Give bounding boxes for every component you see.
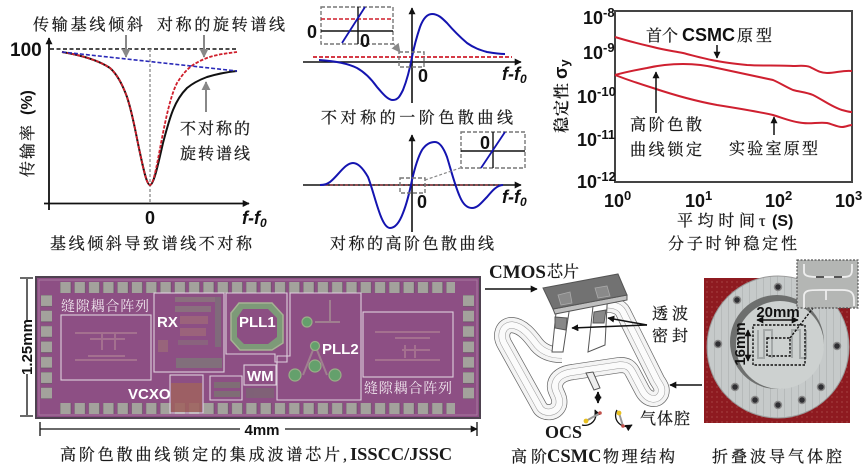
- arrow to chip: [485, 288, 537, 290]
- x axis title: [677, 212, 793, 230]
- coupling double arrow: [597, 392, 599, 403]
- connector: [425, 168, 460, 180]
- y axis title: y: [557, 59, 572, 67]
- circuit: right array traces: [375, 332, 440, 360]
- transitions: [552, 287, 608, 390]
- dimension: 1.25mm: 1.25mm: [19, 319, 36, 375]
- inset: 0: [360, 31, 370, 51]
- offset line: [320, 184, 503, 186]
- chip labels: PLL2: [322, 341, 359, 358]
- caption: 折叠波导气体腔: [712, 448, 842, 466]
- circuit: PLL1 inner: [237, 309, 277, 344]
- chip labels: VCXO: [128, 386, 171, 403]
- chip labels: RX: [157, 314, 178, 331]
- label: high order lock: 曲线锁定: [630, 140, 702, 159]
- caption: [511, 447, 675, 467]
- x tick labels: 10: [835, 191, 855, 211]
- caption: [60, 444, 452, 464]
- connector: [393, 43, 400, 52]
- x axis label: 0: [520, 72, 527, 86]
- y tick labels: 10: [577, 87, 597, 107]
- inset: 0: [307, 22, 317, 42]
- label: high order lock: 高阶色散: [630, 115, 702, 134]
- PCB board: [704, 278, 850, 423]
- inner recess: [730, 295, 824, 389]
- arrow from gas cell: [670, 384, 702, 386]
- x axis label: f-f: [242, 208, 260, 228]
- dimension: 16mm: 16mm: [732, 322, 749, 366]
- y tick labels: -11: [597, 127, 615, 142]
- circuit: VCXO: [171, 383, 202, 412]
- caption: CSMC: [547, 447, 601, 467]
- x axis title: τ: [759, 213, 766, 230]
- x tick labels: [604, 188, 862, 211]
- x axis label: 0: [520, 195, 527, 209]
- y tick labels: 10: [577, 172, 597, 192]
- y tick labels: 10: [577, 130, 597, 150]
- waveguide loop: [502, 305, 662, 412]
- label: asymmetric rotational line: 旋转谱线: [180, 145, 250, 163]
- chip labels: WM: [247, 368, 274, 385]
- label: CMOS chip: 芯片: [547, 263, 579, 281]
- pads: [41, 282, 474, 414]
- CMOS chip block: [543, 274, 627, 314]
- zoom box: [399, 52, 424, 67]
- label: asymmetric rotational line: 不对称的: [180, 120, 250, 138]
- y tick labels: -8: [603, 5, 615, 20]
- caption: 对称的高阶色散曲线: [330, 234, 494, 253]
- zoom box: [400, 178, 425, 193]
- chip labels: 缝隙耦合阵列: [364, 380, 452, 397]
- caption: 高阶: [511, 447, 547, 466]
- panel: CSMC physical structure: [485, 262, 702, 467]
- dimension: 4mm: [40, 422, 477, 439]
- caption: 物理结构: [603, 448, 675, 466]
- chip labels: 缝隙耦合阵列: [61, 298, 149, 315]
- dimension: 1.25mm: [19, 278, 36, 416]
- y axis title: [551, 59, 572, 133]
- label: first CSMC: 首个: [646, 27, 678, 45]
- curve: [320, 142, 503, 228]
- zero label: 0: [417, 192, 427, 212]
- y axis title: [19, 90, 37, 177]
- label: first CSMC: 原型: [737, 27, 772, 45]
- x tick labels: 10: [604, 191, 624, 211]
- molecules: [582, 410, 632, 428]
- inset: [307, 7, 393, 51]
- x axis label: 0: [260, 216, 267, 230]
- label: gas cell: 气体腔: [640, 410, 690, 428]
- panel: integrated chip photo: [19, 277, 480, 464]
- label: CMOS chip: CMOS: [489, 262, 546, 283]
- circuit: PLL2 inductors: [289, 300, 341, 381]
- openings in chip: [558, 286, 610, 305]
- panel: high order dispersion: [303, 132, 527, 253]
- inner floor: [736, 301, 824, 389]
- label: asymmetric rotational line: [180, 120, 250, 163]
- dimension boxes: [753, 308, 813, 365]
- y axis title: (%): [19, 90, 36, 115]
- curve: lab prototype: [615, 75, 852, 127]
- region outlines: [61, 293, 453, 413]
- curve: asymmetric line: [62, 52, 237, 185]
- caption: ISSCC/JSSC: [350, 444, 452, 464]
- y tick labels: -12: [597, 169, 616, 184]
- zero label: 0: [418, 66, 428, 86]
- x tick labels: 10: [765, 191, 785, 211]
- chip labels: [61, 298, 452, 403]
- y tick labels: 10: [583, 8, 603, 28]
- dimension: 20mm: 20mm: [756, 304, 800, 321]
- label: first CSMC: [646, 25, 772, 45]
- circuit: RX block: [158, 297, 222, 368]
- inset: [461, 132, 525, 168]
- curve: symmetric line: [62, 52, 237, 185]
- y tick labels: [577, 5, 616, 192]
- x tick 0: 0: [145, 208, 155, 228]
- x tick labels: 10: [685, 191, 705, 211]
- axes: [44, 38, 249, 210]
- caption: 不对称的一阶色散曲线: [321, 109, 513, 127]
- axes: [303, 135, 521, 232]
- dimension: 4mm: 4mm: [244, 422, 280, 439]
- curve: [319, 14, 505, 100]
- x axis title: 平均时间: [677, 212, 755, 230]
- label: first CSMC: CSMC: [682, 25, 735, 45]
- panel: first order dispersion: [303, 7, 527, 127]
- chip labels: PLL1: [239, 314, 276, 331]
- x axis label: f-f: [502, 187, 520, 207]
- baseline: blue dashed tilt: [62, 52, 237, 71]
- seal arrows: [572, 318, 647, 328]
- circuit: lower blocks: [214, 382, 274, 398]
- inner seal ring: [39, 280, 477, 415]
- plot frame: [615, 11, 852, 182]
- x tick labels: 3: [855, 188, 862, 203]
- circuit: PLL1 octagon inductor: [231, 303, 283, 350]
- reference lines: [50, 49, 238, 204]
- metal flange: [707, 276, 849, 418]
- x tick labels: 2: [785, 188, 792, 203]
- label: transmission baseline tilt: 传输基线倾斜: [33, 16, 143, 34]
- caption: 高阶色散曲线锁定的集成波谱芯片,: [60, 445, 347, 464]
- arrows: [656, 45, 774, 135]
- y axis title: σ: [551, 67, 571, 79]
- x axis title: (S): [772, 213, 793, 230]
- y tick labels: -9: [603, 40, 615, 55]
- bolts: [714, 284, 840, 408]
- label: window seal: 透波: [652, 305, 688, 323]
- y tick labels: 10: [583, 43, 603, 63]
- panel: folded waveguide gas cell photo: [704, 260, 858, 466]
- label: symmetric rotational line: 对称的旋转谱线: [157, 16, 285, 34]
- x tick labels: 1: [705, 188, 712, 203]
- panel: clock stability chart: [551, 5, 862, 253]
- label: window seal: [652, 305, 688, 345]
- panel: baseline tilt chart: [10, 16, 285, 253]
- label: high order lock: [630, 115, 702, 159]
- curve: high order lock: [615, 64, 852, 112]
- caption: 基线倾斜导致谱线不对称: [50, 235, 253, 253]
- axes: [303, 8, 521, 103]
- label: lab prototype: 实验室原型: [729, 140, 818, 158]
- caption: 分子时钟稳定性: [668, 235, 797, 253]
- x axis label: f-f: [502, 64, 520, 84]
- inset photo: [797, 260, 858, 308]
- circuit: left array traces: [75, 333, 137, 360]
- y tick 100: 100: [10, 40, 42, 61]
- inset: 0: [480, 133, 490, 153]
- y axis title: 传输率: [19, 125, 37, 177]
- folded channel: [758, 330, 806, 358]
- label: CMOS chip: [489, 262, 579, 283]
- label: OCS: OCS: [545, 422, 582, 442]
- y tick labels: -10: [597, 84, 616, 99]
- offset line: [313, 56, 512, 58]
- grey arrows: [126, 35, 206, 112]
- label: window seal: 密封: [652, 327, 688, 345]
- chip body: [36, 277, 480, 418]
- curve: first CSMC prototype: [615, 37, 852, 73]
- x tick labels: 0: [624, 188, 631, 203]
- y axis title: 稳定性: [552, 83, 571, 133]
